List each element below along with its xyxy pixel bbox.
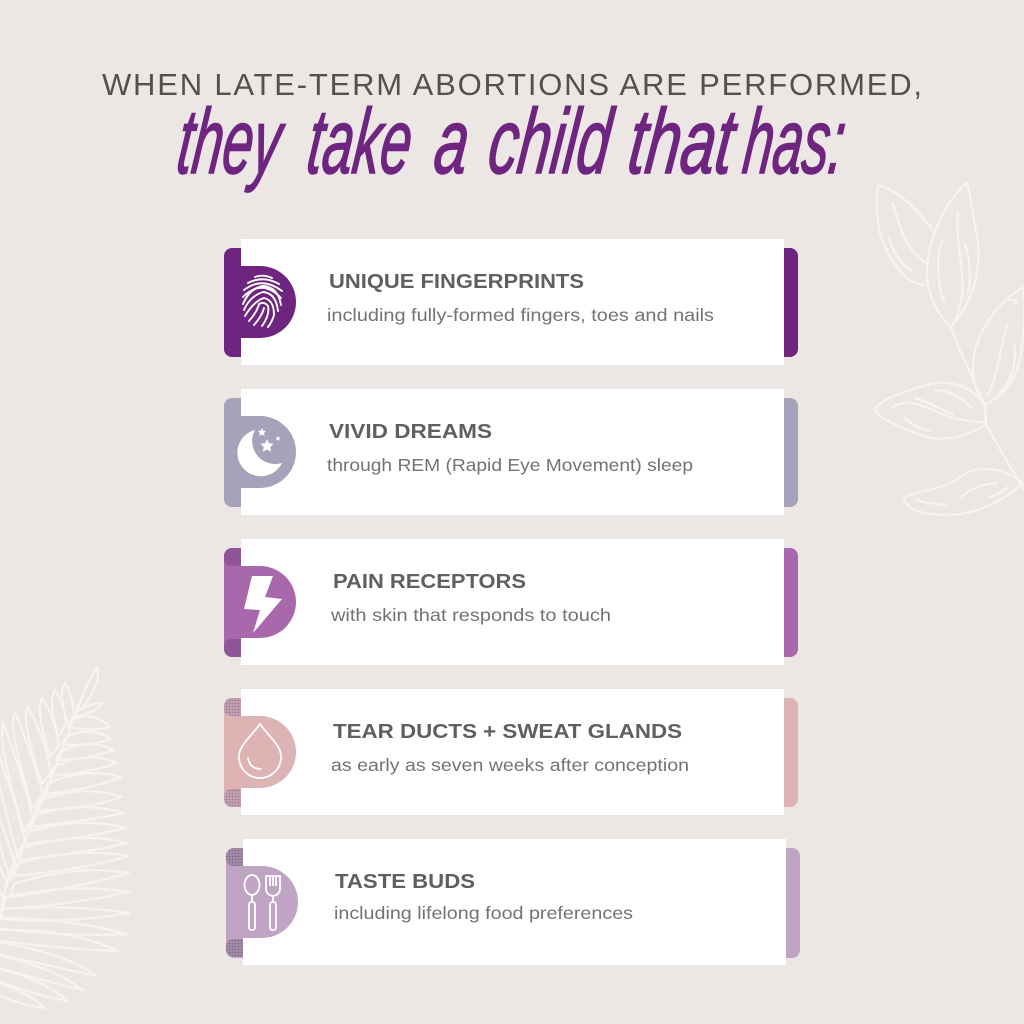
icon: fingerprint bbox=[243, 276, 282, 327]
icon badge bbox=[224, 716, 296, 788]
script heading: they take a child that has: a bbox=[430, 89, 475, 193]
script heading: they take a child that has bbox=[173, 89, 851, 193]
tab corner: top bbox=[224, 698, 241, 716]
card: unique fingerprints bbox=[224, 239, 798, 365]
back tab: orchid bbox=[224, 548, 798, 657]
card: taste buds bbox=[226, 839, 800, 965]
back tab: grey lavender bbox=[224, 398, 798, 507]
script heading: they take a child that has: take bbox=[303, 89, 418, 193]
heading: TEAR DUCTS + SWEAT GLANDS bbox=[333, 720, 682, 743]
heading: VIVID DREAMS bbox=[329, 420, 492, 443]
back tab: dusty pink bbox=[224, 698, 798, 807]
heading: TASTE BUDS bbox=[335, 870, 475, 893]
decoration: fern frond bottom left bbox=[0, 667, 130, 1008]
card body bbox=[241, 239, 784, 365]
description: including lifelong food preferences bbox=[334, 903, 633, 923]
icon badge bbox=[224, 566, 296, 638]
card body bbox=[241, 689, 784, 815]
heading: PAIN RECEPTORS bbox=[333, 570, 526, 593]
tab corner: bottom bbox=[224, 639, 241, 657]
card body bbox=[241, 539, 784, 665]
tab corner: bottom bbox=[226, 939, 243, 957]
tab corner: top bbox=[226, 848, 243, 866]
icon: moon and stars bbox=[237, 428, 282, 476]
icon: spoon and fork bbox=[244, 875, 280, 930]
description: including fully-formed fingers, toes and nails bbox=[327, 305, 714, 325]
icon badge bbox=[226, 866, 298, 938]
icon: water drop bbox=[239, 724, 281, 778]
card body bbox=[241, 389, 784, 515]
decoration: leaf branch right bbox=[875, 183, 1024, 515]
tab corner: top bbox=[224, 548, 241, 566]
script heading: they take a child that has: they bbox=[173, 89, 290, 193]
title: when late-term abortions are performed: WHEN LATE-TERM ABORTIONS ARE PERFORMED, bbox=[102, 67, 922, 102]
tab corner: bottom bbox=[224, 789, 241, 807]
card: pain receptors bbox=[224, 539, 798, 665]
script heading: they take a child that has: child bbox=[484, 89, 619, 193]
icon badge bbox=[224, 266, 296, 338]
card: vivid dreams bbox=[224, 389, 798, 515]
description: through REM (Rapid Eye Movement) sleep bbox=[327, 455, 693, 475]
card: tear ducts and sweat glands bbox=[224, 689, 798, 815]
script heading: they take a child that has: that bbox=[624, 89, 743, 193]
description: with skin that responds to touch bbox=[330, 605, 611, 625]
script heading: they take a child that has: has: bbox=[739, 89, 851, 193]
description: as early as seven weeks after conception bbox=[331, 755, 689, 775]
icon badge bbox=[224, 416, 296, 488]
icon: lightning bolt bbox=[244, 576, 282, 633]
back tab: purple bbox=[224, 248, 798, 357]
back tab: mauve bbox=[226, 848, 800, 958]
heading: UNIQUE FINGERPRINTS bbox=[329, 270, 584, 293]
card body bbox=[243, 839, 786, 965]
